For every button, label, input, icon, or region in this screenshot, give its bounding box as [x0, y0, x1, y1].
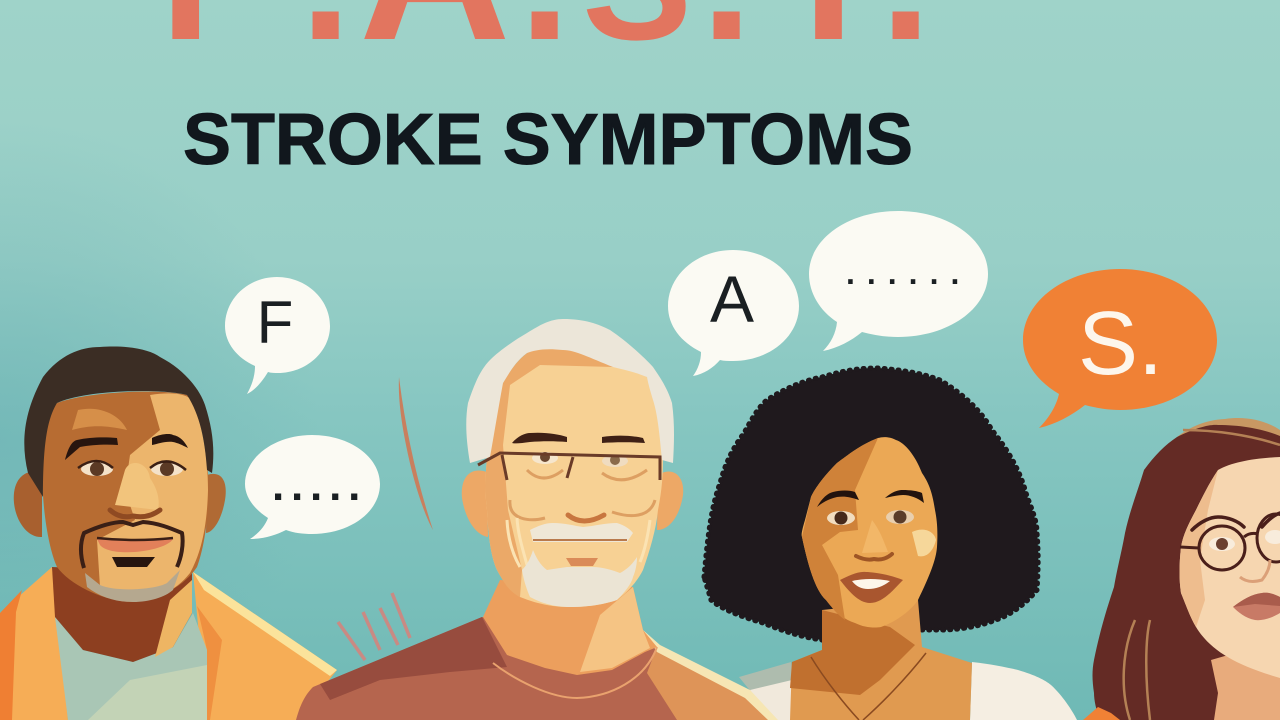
- under-eye creases: [510, 470, 655, 520]
- necklace: [811, 653, 926, 720]
- grey beard: [85, 570, 180, 602]
- neck: [52, 567, 192, 662]
- white moustache: [530, 523, 633, 542]
- speech bubble: dots: .....: [272, 461, 367, 510]
- orange shoulder: [1083, 707, 1120, 720]
- face: [42, 392, 208, 602]
- person: woman with curly hair: [704, 368, 1077, 720]
- neck: [1211, 640, 1280, 720]
- lips: [1233, 593, 1280, 620]
- hair: [1092, 425, 1280, 720]
- person: woman with glasses: [1083, 418, 1280, 720]
- nose: [568, 515, 604, 521]
- shirt: [55, 613, 207, 720]
- person: older man with glasses: [296, 319, 778, 720]
- nose: [1240, 560, 1270, 581]
- hair: [704, 368, 1038, 650]
- glasses: [478, 453, 660, 480]
- ears: [14, 471, 42, 537]
- speech bubble: F: F: [257, 289, 293, 356]
- speech bubble: A: A: [710, 262, 754, 336]
- brows: [1192, 513, 1280, 530]
- white hair: [466, 319, 674, 463]
- glasses: [1199, 526, 1245, 570]
- face: [1180, 457, 1280, 678]
- speech bubble: dots large: ......: [846, 255, 971, 291]
- blonde hair rim: [1177, 418, 1280, 445]
- wrinkles: [507, 518, 650, 567]
- moustache and sideburn beard: [81, 522, 183, 568]
- face: [486, 349, 663, 607]
- neck: [483, 580, 657, 675]
- title: F.A.S.T.: [160, 0, 931, 84]
- eyes: [532, 452, 558, 464]
- decorative brush marks: [338, 377, 433, 660]
- eyes: [827, 511, 855, 525]
- heading: stroke symptoms: STROKE SYMPTOMS: [183, 100, 913, 180]
- nose: [862, 520, 888, 553]
- face: [802, 437, 937, 628]
- ears: [462, 470, 488, 537]
- lower lip: [566, 558, 598, 566]
- speech bubble: dots: [245, 435, 380, 539]
- neck and chest: [790, 600, 972, 720]
- shirt: [296, 617, 775, 720]
- speech bubble: dots large: [809, 211, 988, 351]
- brows: [65, 434, 188, 460]
- speech bubble: S: S.: [1078, 294, 1163, 394]
- beard: [522, 550, 637, 607]
- top: [739, 662, 800, 720]
- speech bubble: F: [225, 277, 330, 394]
- speech bubble: A: [668, 250, 799, 376]
- brows: [817, 490, 924, 507]
- nose: [115, 463, 159, 510]
- hair: [24, 347, 213, 497]
- mouth: [97, 539, 173, 552]
- eyes: [1209, 537, 1235, 551]
- jacket: [0, 567, 337, 720]
- mouth: [840, 572, 903, 603]
- eyes: [81, 462, 113, 476]
- brows: [512, 433, 645, 443]
- speech bubble: S: [1023, 269, 1217, 428]
- person: man with moustache: [0, 347, 337, 720]
